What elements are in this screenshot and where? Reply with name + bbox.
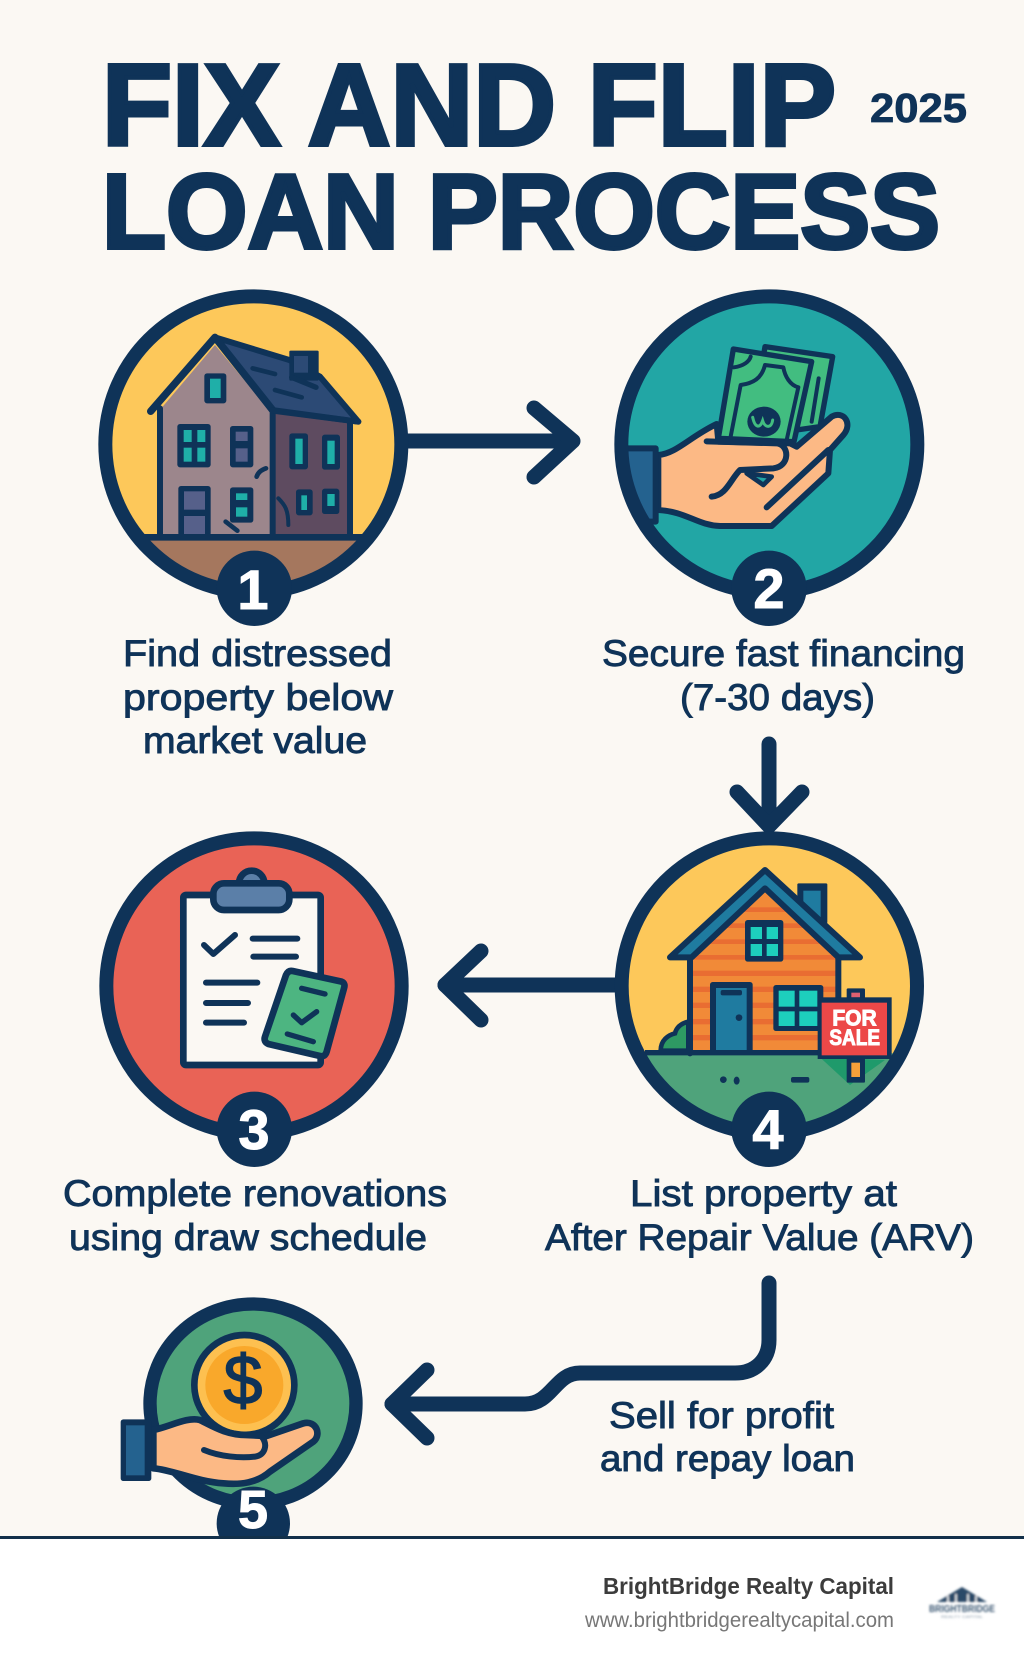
- sign text: for sale: [829, 1006, 880, 1050]
- text: step 2 caption: [602, 633, 965, 718]
- sign text: for sale: FOR: [832, 1006, 877, 1031]
- year label: 2025: [870, 85, 967, 131]
- text: step 3 caption: Complete renovations: [63, 1173, 447, 1214]
- arrow: step 4 to step 3: [445, 951, 625, 1020]
- badge number 1: 1: [237, 558, 269, 621]
- text: step 5 caption: and repay loan: [600, 1438, 855, 1479]
- footer website: www.brightbridgerealtycapital.com: [584, 1609, 894, 1632]
- icon: hand holding cash: [620, 296, 918, 626]
- text: step 1 caption: Find distressed: [123, 633, 392, 674]
- text: step 3 caption: using draw schedule: [69, 1217, 427, 1258]
- badge number 2: 2: [753, 557, 785, 620]
- coin dollar sign: $: [224, 1341, 262, 1419]
- panel: step 1: [105, 296, 402, 761]
- text: step 4 caption: [545, 1173, 974, 1258]
- footer company name: BrightBridge Realty Capital: [603, 1573, 894, 1599]
- footer logo: REALTY CAPITAL: [941, 1614, 984, 1619]
- footer logo: BRIGHTBRIDGE: [929, 1604, 995, 1615]
- text: step 2 caption: Secure fast financing: [602, 633, 965, 674]
- icon: distressed house: [105, 296, 402, 626]
- badge number 5: 5: [238, 1480, 268, 1540]
- title: LOAN PROCESS: [102, 153, 940, 271]
- badge number 4: 4: [752, 1098, 784, 1161]
- panel: step 2: [602, 296, 965, 718]
- title: [102, 40, 940, 271]
- footer band: [0, 1536, 1024, 1666]
- icon: hand holding coin: [121, 1304, 356, 1560]
- text: step 5 caption: [600, 1395, 855, 1479]
- text: step 1 caption: [123, 633, 393, 761]
- panel: step 4: [545, 838, 974, 1258]
- text: step 1 caption: market value: [143, 720, 367, 761]
- text: step 3 caption: [63, 1173, 447, 1258]
- text: step 1 caption: property below: [123, 677, 393, 718]
- sign text: for sale: SALE: [829, 1025, 880, 1050]
- text: step 4 caption: List property at: [630, 1173, 898, 1214]
- icon: renovated house with for sale sign: [621, 838, 918, 1167]
- text: step 5 caption: Sell for profit: [609, 1395, 835, 1436]
- arrow: step 4 to step 5: [392, 1283, 769, 1438]
- arrow: step 1 to step 2: [405, 408, 573, 477]
- icon: renovation checklist clipboard: [106, 838, 402, 1167]
- text: step 4 caption: After Repair Value (ARV): [545, 1217, 974, 1258]
- arrow: step 2 to step 4: [737, 744, 802, 826]
- badge number 3: 3: [238, 1098, 270, 1161]
- footer logo: [929, 1587, 995, 1619]
- panel: step 3: [63, 838, 447, 1258]
- panel: step 5: [121, 1304, 855, 1560]
- title: FIX AND FLIP: [102, 40, 836, 170]
- text: step 2 caption: (7-30 days): [680, 677, 875, 718]
